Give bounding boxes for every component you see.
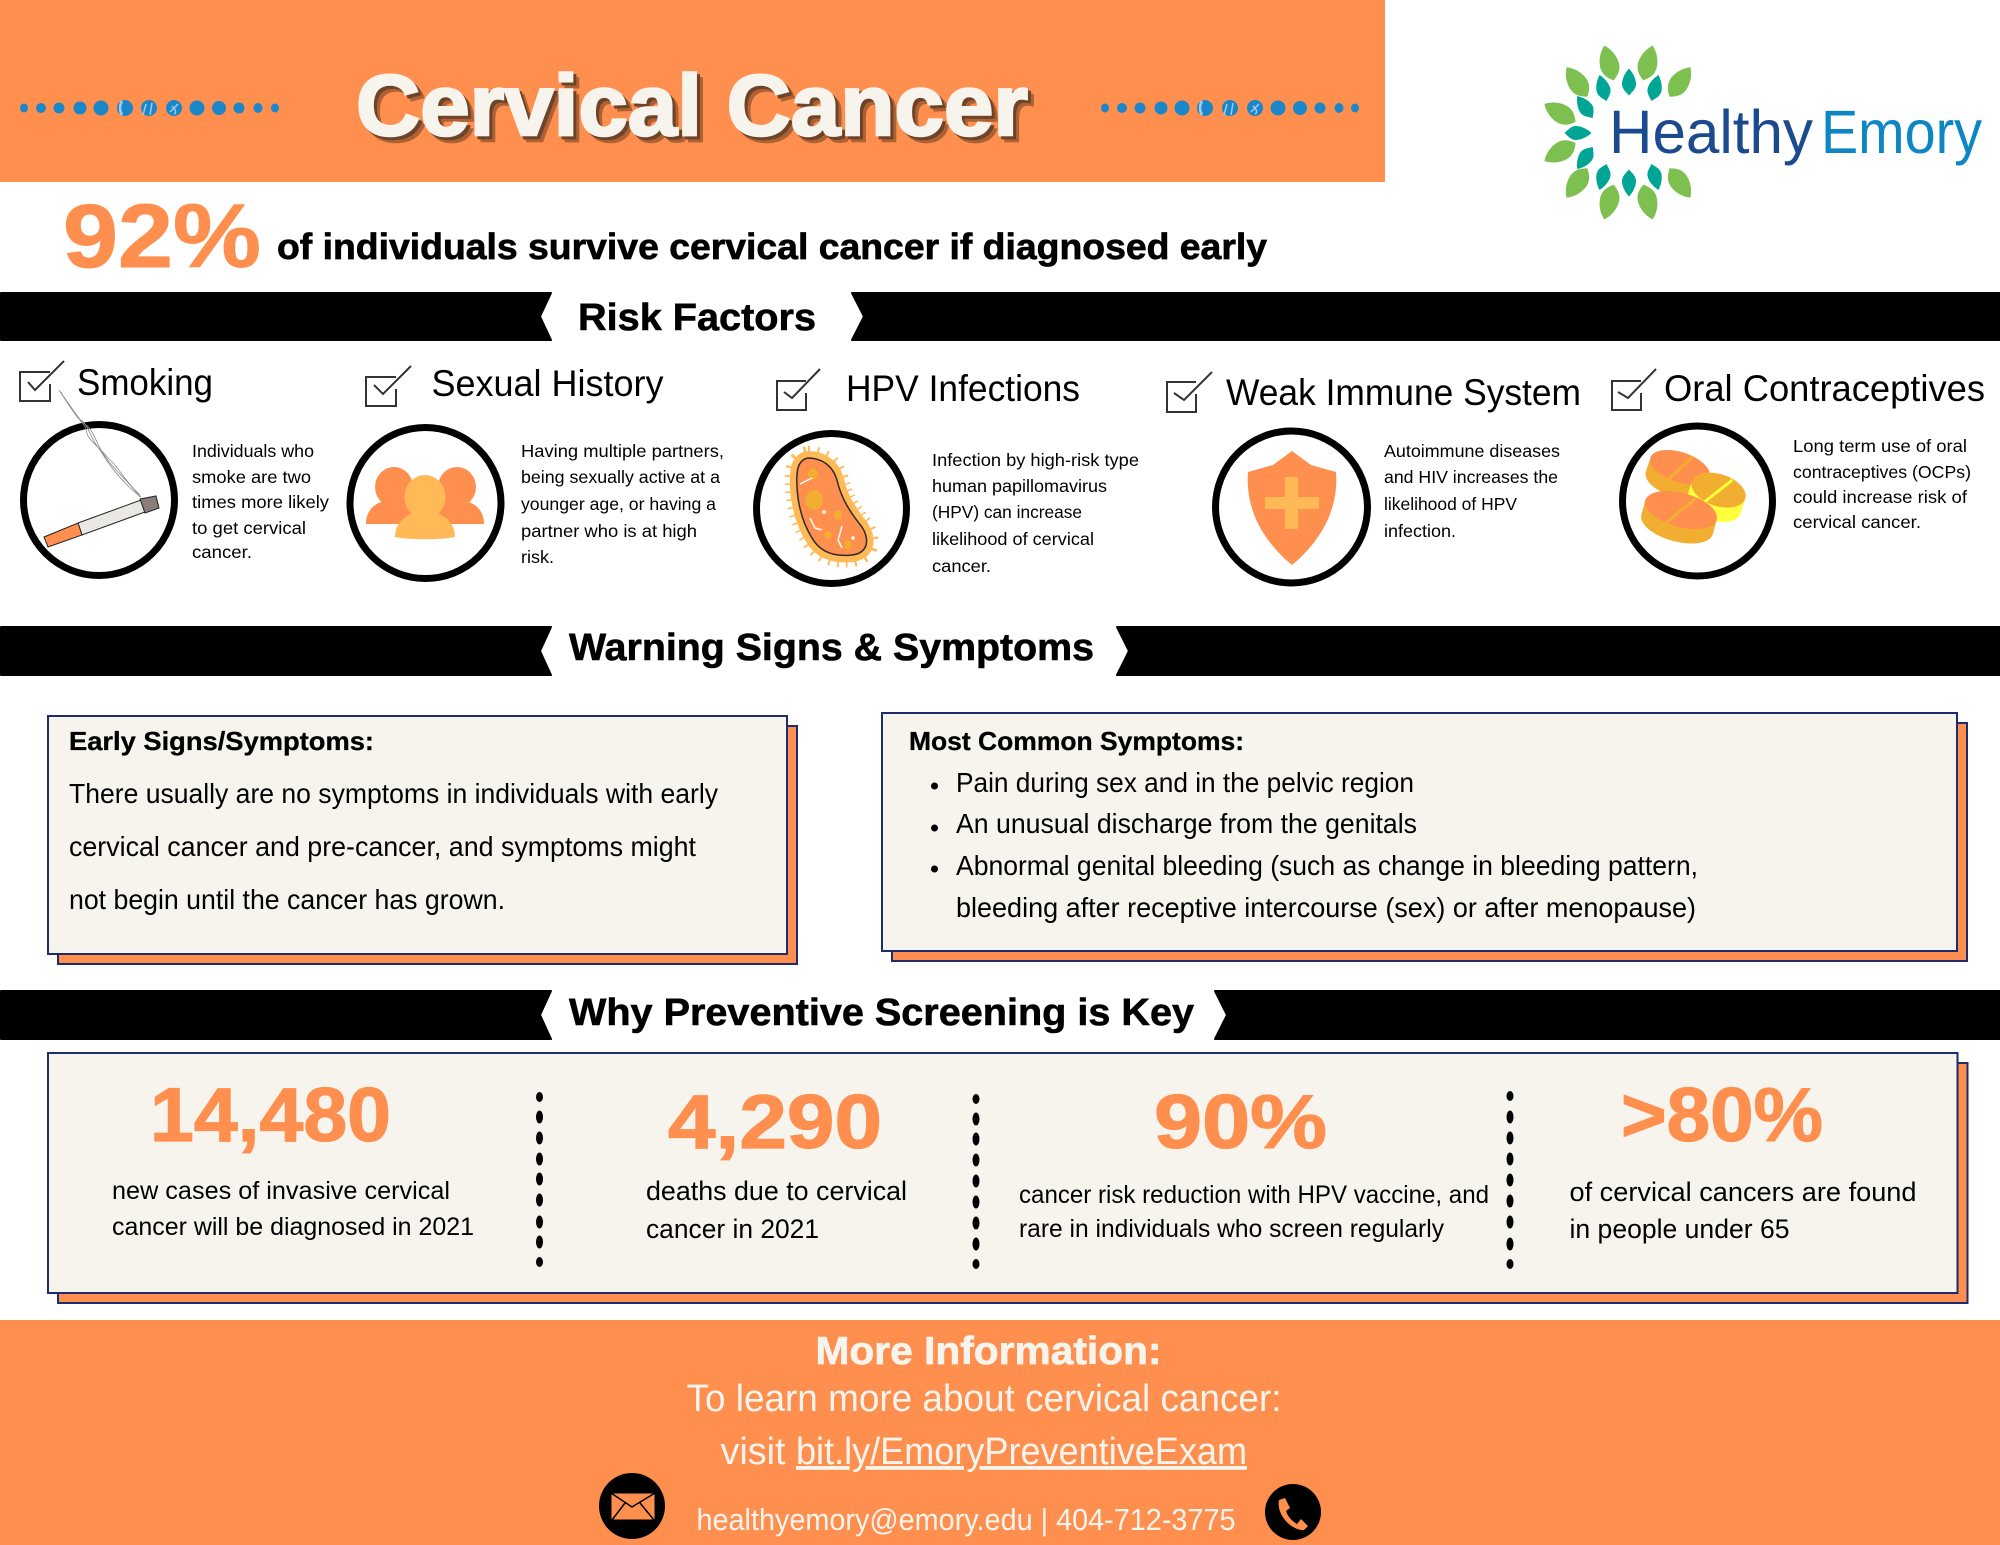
risk factor: Smoking — [20, 361, 329, 576]
icon: checkbox — [20, 361, 64, 401]
section banner: Warning Signs & Symptoms — [1, 627, 2000, 675]
stat: deaths: cancer in 2021 — [646, 1214, 819, 1244]
divider — [1506, 1091, 1514, 1269]
stat: risk reduction: rare in individuals who screen regularly — [1019, 1215, 1444, 1243]
risk factor: HPV Infections: cancer. — [932, 556, 991, 576]
stat: under 65: of cervical cancers are found — [1570, 1177, 1916, 1207]
risk factor: Smoking: Individuals who — [192, 441, 314, 461]
stat: risk reduction: cancer risk reduction with HPV vaccine, and — [1019, 1181, 1489, 1209]
stat: deaths — [646, 1080, 907, 1244]
header banner — [0, 0, 1385, 182]
risk factor: Weak Immune System: Weak Immune System — [1226, 372, 1581, 413]
icon: pills in circle — [1622, 426, 1772, 576]
stat: risk reduction — [1019, 1080, 1489, 1243]
stat: deaths: 4,290 — [668, 1080, 882, 1165]
risk factor: HPV Infections: human papillomavirus — [932, 476, 1107, 496]
logo: HealthyEmory — [1540, 43, 1982, 222]
icon: shield in circle — [1216, 431, 1368, 583]
headline text: of individuals survive cervical cancer if diagnosed early — [277, 226, 1267, 267]
stat: new cases — [112, 1073, 474, 1241]
risk factor: Weak Immune System: infection. — [1384, 521, 1456, 541]
footer link: bit.ly/EmoryPreventiveExam — [796, 1431, 1247, 1473]
divider — [536, 1092, 543, 1267]
panel: screening statistics — [48, 1053, 1968, 1303]
divider — [972, 1094, 980, 1269]
risk factor: HPV Infections: likelihood of cervical — [932, 529, 1094, 549]
stat: deaths: deaths due to cervical — [646, 1176, 907, 1206]
bullet list: An unusual discharge from the genitals — [956, 808, 1417, 839]
headline stat: 92% — [63, 187, 1267, 287]
body text: There usually are no symptoms in individuals with early — [69, 778, 718, 809]
icon: checkbox — [777, 369, 820, 410]
risk factor: Sexual History: being sexually active at a — [521, 467, 720, 487]
risk factor: Weak Immune System: and HIV increases the — [1384, 467, 1558, 487]
risk factor: Oral Contraceptives: Oral Contraceptives — [1664, 368, 1985, 409]
risk factor: HPV Infections: (HPV) can increase — [932, 502, 1082, 522]
risk factor: HPV Infections — [756, 368, 1139, 584]
body text: cervical cancer and pre-cancer, and symptoms might — [69, 831, 696, 862]
section banner: Risk Factors: Risk Factors — [578, 297, 816, 339]
risk factor: Smoking: cancer. — [192, 542, 252, 562]
risk factor: Sexual History: partner who is at high — [521, 521, 697, 541]
risk factor: Weak Immune System: Autoimmune diseases — [1384, 441, 1560, 461]
icon: phone — [1265, 1484, 1321, 1540]
risk factor: Smoking: to get cervical — [192, 518, 306, 538]
risk factor: Oral Contraceptives: contraceptives (OCPs) — [1793, 462, 1971, 482]
bullet list — [931, 767, 1698, 923]
stat: under 65 — [1570, 1073, 1916, 1244]
stat: under 65: >80% — [1621, 1073, 1823, 1158]
icon: leaf flower — [1540, 43, 1698, 222]
icon: envelope — [599, 1473, 665, 1539]
stat: new cases: cancer will be diagnosed in 2021 — [112, 1213, 474, 1241]
risk factor: HPV Infections: Infection by high-risk type — [932, 450, 1139, 470]
footer link: visit — [720, 1431, 786, 1473]
decorative dots right — [1101, 100, 1359, 116]
section banner: Why Preventive Screening is Key — [1, 991, 2000, 1039]
decorative dots left — [20, 100, 279, 116]
risk factor: Oral Contraceptives: could increase risk of — [1793, 487, 1967, 507]
wordmark: Healthy — [1609, 98, 1813, 166]
risk factor: Smoking: smoke are two — [192, 467, 311, 487]
panel: most common symptoms — [882, 713, 1967, 961]
wordmark: Emory — [1821, 98, 1982, 166]
contact details: healthyemory@emory.edu | 404-712-3775 — [696, 1502, 1236, 1537]
risk factor: Oral Contraceptives: Long term use of oral — [1793, 436, 1967, 456]
stat: new cases: new cases of invasive cervical — [112, 1177, 450, 1205]
risk factor: Sexual History — [350, 363, 724, 578]
footer panel — [0, 1320, 2000, 1545]
risk factor: Sexual History: risk. — [521, 547, 554, 567]
icon: group of people in circle — [350, 428, 501, 578]
footer heading: More Information: — [816, 1330, 1162, 1373]
risk factor: Sexual History: younger age, or having a — [521, 494, 716, 514]
title: Cervical Cancer — [356, 58, 1028, 154]
risk factor: Oral Contraceptives: cervical cancer. — [1793, 512, 1921, 532]
risk factor: Weak Immune System: likelihood of HPV — [1384, 494, 1517, 514]
bullet list: bleeding after receptive intercourse (sex) or after menopause) — [956, 892, 1696, 923]
icon: virus cell in circle — [756, 434, 906, 584]
icon: checkbox — [1167, 372, 1212, 412]
risk factor: Smoking: Smoking — [77, 362, 213, 403]
risk factor: HPV Infections: HPV Infections — [846, 368, 1080, 409]
risk factor: Oral Contraceptives — [1612, 368, 1985, 576]
risk factor: Weak Immune System — [1167, 372, 1581, 583]
bullet list: Abnormal genital bleeding (such as change in bleeding pattern, — [956, 850, 1698, 881]
stat: risk reduction: 90% — [1154, 1080, 1327, 1165]
heading: Most Common Symptoms: — [909, 726, 1244, 756]
stat: under 65: in people under 65 — [1570, 1214, 1790, 1244]
risk factor: Smoking: times more likely — [192, 492, 329, 512]
panel: early signs — [48, 716, 797, 964]
section banner: Risk Factors — [1, 293, 2000, 340]
heading: Early Signs/Symptoms: — [69, 726, 374, 756]
bullet list: Pain during sex and in the pelvic region — [956, 767, 1414, 798]
risk factor: Sexual History: Having multiple partners, — [521, 441, 724, 461]
icon: cigarette in circle — [24, 390, 174, 576]
section banner: Why Preventive Screening is Key: Why Preventive Screening is Key — [569, 992, 1194, 1034]
risk factor: Sexual History: Sexual History — [432, 363, 664, 404]
stat: new cases: 14,480 — [150, 1073, 391, 1158]
headline stat: 92%: 92% — [63, 187, 261, 287]
icon: checkbox — [366, 366, 411, 406]
section banner: Warning Signs & Symptoms: Warning Signs & Symptoms — [569, 627, 1094, 669]
body text: not begin until the cancer has grown. — [69, 884, 505, 915]
icon: checkbox — [1612, 369, 1656, 410]
footer text: To learn more about cervical cancer: — [686, 1378, 1282, 1420]
